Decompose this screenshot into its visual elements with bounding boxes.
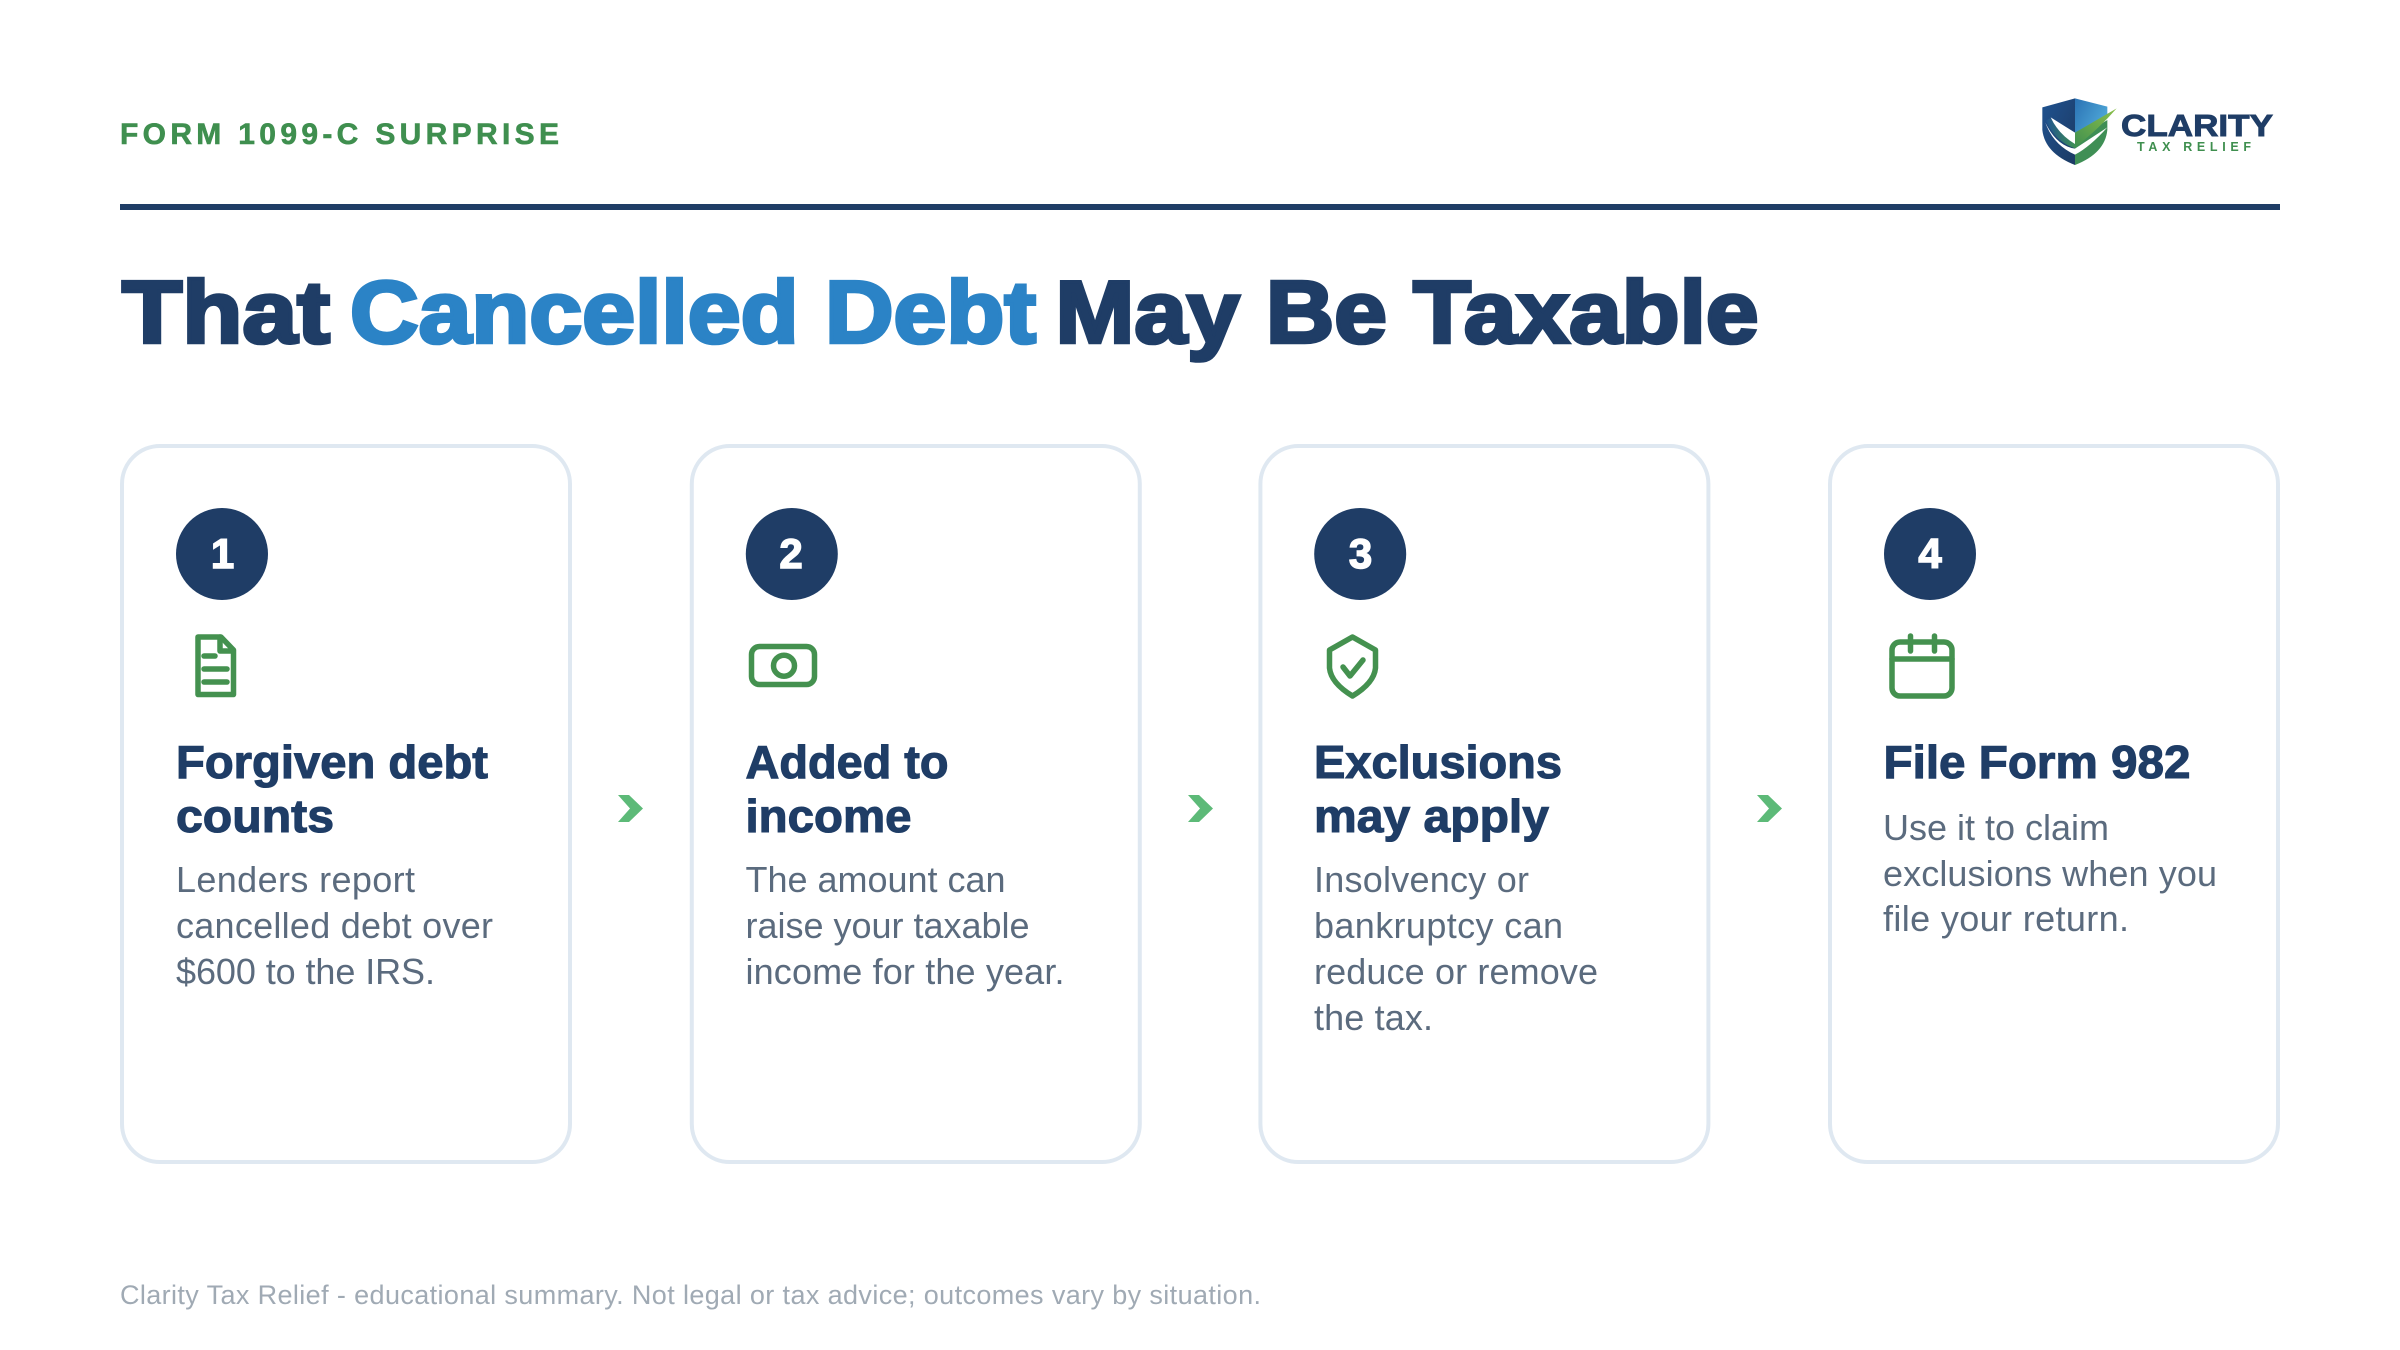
text: step 4	[1883, 807, 2217, 939]
heading: step 3: may apply	[1314, 790, 1549, 842]
text: step 1	[176, 859, 493, 992]
heading: step 2: Added to	[746, 736, 948, 788]
icon: document	[198, 637, 234, 694]
text: step 2: income for the year.	[746, 951, 1064, 992]
heading: step 3: Exclusions	[1314, 736, 1562, 788]
text: step 4: Use it to claim	[1883, 807, 2109, 848]
step number 2	[746, 508, 838, 600]
panel: step 4	[1830, 446, 2278, 1162]
heading: step 2	[746, 736, 948, 842]
heading: step 1: Forgiven debt	[176, 736, 488, 788]
text: step 3: reduce or remove	[1314, 951, 1598, 992]
icon: shield check	[1330, 637, 1376, 696]
arrow 3	[1757, 795, 1782, 822]
text: step 2	[746, 859, 1064, 992]
step number 3: 3	[1349, 530, 1372, 577]
step number 4: 4	[1918, 530, 1942, 577]
logo: Clarity Tax Relief: CLARITY	[2121, 108, 2273, 143]
heading: step 1	[176, 736, 488, 842]
footer disclaimer: Clarity Tax Relief - educational summary. Not legal or tax advice; outcomes vary by situation.	[120, 1280, 1261, 1310]
eyebrow label: FORM 1099-C SURPRISE	[120, 118, 559, 151]
step number 4	[1884, 508, 1976, 600]
text: step 1: $600 to the IRS.	[176, 951, 435, 992]
text: step 3: bankruptcy can	[1314, 905, 1563, 946]
text: step 4: file your return.	[1883, 898, 2129, 939]
panel: step 1	[122, 446, 570, 1162]
logo: Clarity Tax Relief	[2042, 98, 2273, 165]
text: step 3: Insolvency or	[1314, 859, 1529, 900]
text: step 4: exclusions when you	[1883, 853, 2217, 894]
heading: step 1: counts	[176, 790, 334, 842]
icon: logo shield	[2042, 98, 2117, 165]
text: step 3	[1314, 859, 1598, 1038]
title: That	[122, 262, 330, 362]
title: Cancelled Debt	[350, 262, 1036, 362]
text: step 2: raise your taxable	[746, 905, 1030, 946]
step number 2: 2	[779, 530, 803, 577]
step number 1	[176, 508, 268, 600]
arrow 2	[1188, 795, 1213, 822]
arrow 1	[618, 795, 643, 822]
text: step 3: the tax.	[1314, 997, 1433, 1038]
heading: step 4: File Form 982	[1884, 736, 2190, 788]
text: step 2: The amount can	[746, 859, 1006, 900]
icon: banknote	[752, 646, 814, 684]
heading: step 2: income	[746, 790, 912, 842]
heading: step 3	[1314, 736, 1562, 842]
text: step 1: cancelled debt over	[176, 905, 493, 946]
logo: Clarity Tax Relief: TAX RELIEF	[2137, 140, 2251, 154]
panel: step 2	[692, 446, 1140, 1162]
icon: calendar	[1892, 636, 1952, 696]
panel: step 3	[1260, 446, 1708, 1162]
title	[122, 262, 1758, 362]
step number 3	[1314, 508, 1406, 600]
title: May Be Taxable	[1056, 262, 1758, 362]
text: step 1: Lenders report	[176, 859, 415, 900]
step number 1: 1	[211, 530, 234, 577]
